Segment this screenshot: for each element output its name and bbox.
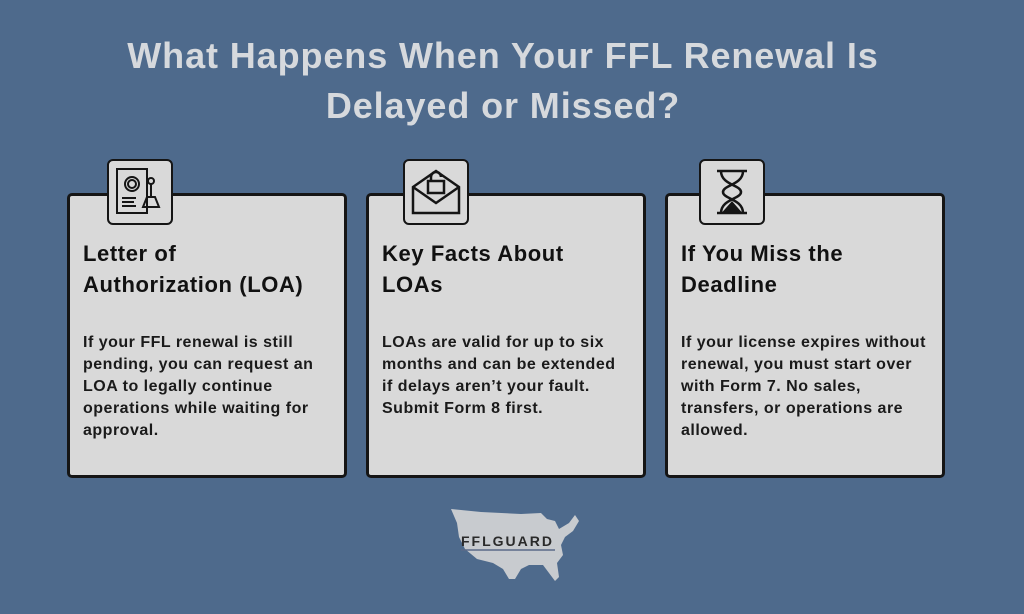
title: What Happens When Your FFL Renewal Is bbox=[127, 35, 879, 76]
panel: key facts: LOAs bbox=[382, 272, 443, 297]
title: Delayed or Missed? bbox=[326, 85, 680, 126]
panel: key facts: Key Facts About bbox=[382, 241, 564, 266]
panel: letter of authorization bbox=[67, 193, 347, 478]
logo: FFLGuard map: FFLGUARD bbox=[461, 533, 554, 549]
panel: letter of authorization: If your FFL renewal is still bbox=[83, 334, 293, 351]
panel: key facts: Submit Form 8 first. bbox=[382, 400, 543, 417]
panel: letter of authorization: approval. bbox=[83, 422, 159, 439]
panel: miss deadline: renewal, you must start over bbox=[681, 356, 912, 373]
panel: key facts bbox=[366, 193, 646, 478]
panel: letter of authorization: Letter of bbox=[83, 241, 176, 266]
panel: letter of authorization: Authorization (LOA) bbox=[83, 272, 303, 297]
panel: letter of authorization: operations while waiting for bbox=[83, 400, 309, 417]
panel: miss deadline: transfers, or operations are bbox=[681, 400, 903, 417]
panel: miss deadline bbox=[665, 193, 945, 478]
panel: miss deadline: Deadline bbox=[681, 272, 778, 297]
logo: FFLGuard map bbox=[451, 509, 579, 581]
panel: miss deadline: allowed. bbox=[681, 422, 748, 439]
title bbox=[127, 35, 879, 126]
panel: miss deadline: If your license expires without bbox=[681, 334, 926, 351]
panel: letter of authorization: LOA to legally continue bbox=[83, 378, 273, 395]
icon: hourglass bbox=[699, 159, 765, 225]
panel: miss deadline: If You Miss the bbox=[681, 241, 843, 266]
panel: miss deadline: with Form 7. No sales, bbox=[681, 378, 861, 395]
panel: key facts: months and can be extended bbox=[382, 356, 615, 373]
panel: key facts: LOAs are valid for up to six bbox=[382, 334, 604, 351]
panel: key facts: if delays aren’t your fault. bbox=[382, 378, 590, 395]
icon: envelope lock bbox=[403, 159, 469, 225]
panel: letter of authorization: pending, you can request an bbox=[83, 356, 313, 373]
icon: document with stamp bbox=[107, 159, 173, 225]
